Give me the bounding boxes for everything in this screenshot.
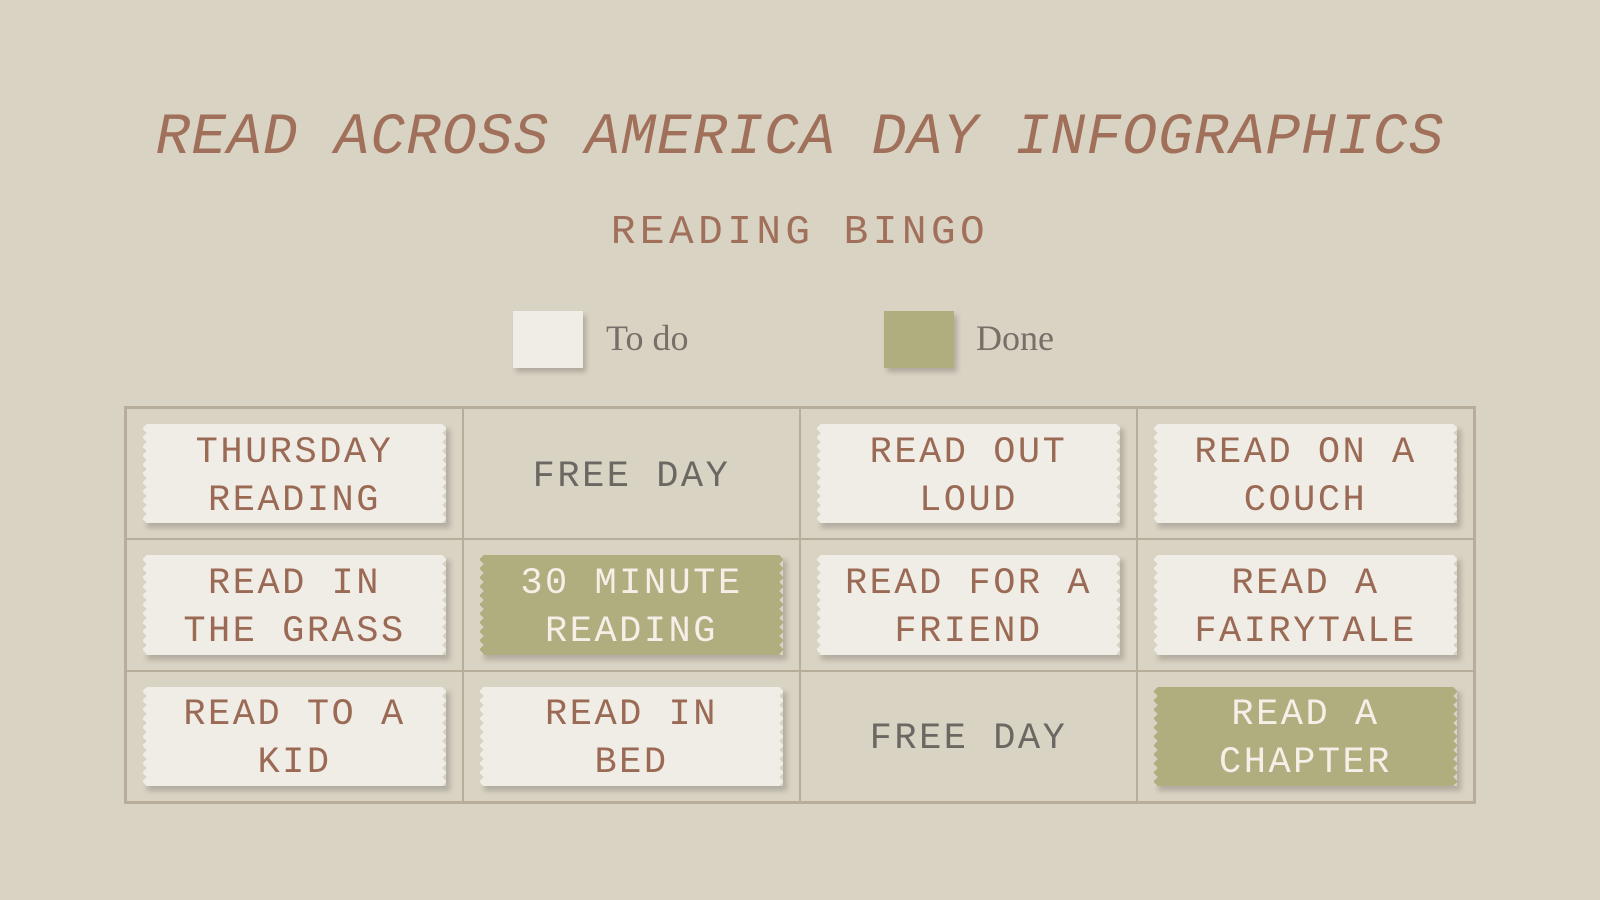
cell: read on a couch: READ ON A <box>1194 432 1417 474</box>
cell: read in bed: BED <box>594 742 669 784</box>
subtitle: READING BINGO <box>611 210 989 256</box>
cell: 30 minute reading (done) <box>463 539 800 671</box>
legend swatch: to do <box>513 311 583 368</box>
cell: read a chapter (done): READ A <box>1231 694 1380 736</box>
cell: 30 minute reading (done): 30 MINUTE <box>520 563 743 605</box>
cell: read in bed: READ IN <box>545 694 718 736</box>
cell: read a chapter (done): CHAPTER <box>1219 742 1392 784</box>
cell: read for a friend <box>800 539 1137 671</box>
cell: read a fairytale: FAIRYTALE <box>1194 611 1417 653</box>
cell: thursday reading: THURSDAY <box>196 432 393 474</box>
cell: thursday reading <box>126 408 463 539</box>
legend label: to do: To do <box>606 318 688 358</box>
cell: read a fairytale <box>1137 539 1474 671</box>
cell: read to a kid <box>126 671 463 802</box>
cell: read for a friend: FRIEND <box>894 611 1043 653</box>
cell: read to a kid: KID <box>257 742 332 784</box>
cell: free day <box>463 408 800 539</box>
cell: read a fairytale: READ A <box>1231 563 1380 605</box>
cell: thursday reading: READING <box>208 480 381 522</box>
title: READ ACROSS AMERICA DAY INFOGRAPHICS <box>155 106 1444 171</box>
cell: free day 2: FREE DAY <box>870 718 1067 760</box>
cell: free day 2 <box>800 671 1137 802</box>
cell: read a chapter (done) <box>1137 671 1474 802</box>
cell: 30 minute reading (done): READING <box>545 611 718 653</box>
legend <box>513 311 1054 374</box>
cell: read on a couch <box>1137 408 1474 539</box>
bingo grid <box>124 406 1476 804</box>
legend swatch: done <box>884 311 954 368</box>
cell: read to a kid: READ TO A <box>183 694 406 736</box>
cell: read for a friend: READ FOR A <box>845 563 1092 605</box>
legend label: done: Done <box>976 318 1054 358</box>
cell: read in the grass <box>126 539 463 671</box>
cell: read in the grass: READ IN <box>208 563 381 605</box>
cell: read in bed <box>463 671 800 802</box>
cell: read on a couch: COUCH <box>1244 480 1367 522</box>
cell: read out loud <box>800 408 1137 539</box>
cell: free day: FREE DAY <box>533 456 730 498</box>
cell: read in the grass: THE GRASS <box>183 611 406 653</box>
cell: read out loud: READ OUT <box>870 432 1067 474</box>
cell: read out loud: LOUD <box>919 480 1018 522</box>
